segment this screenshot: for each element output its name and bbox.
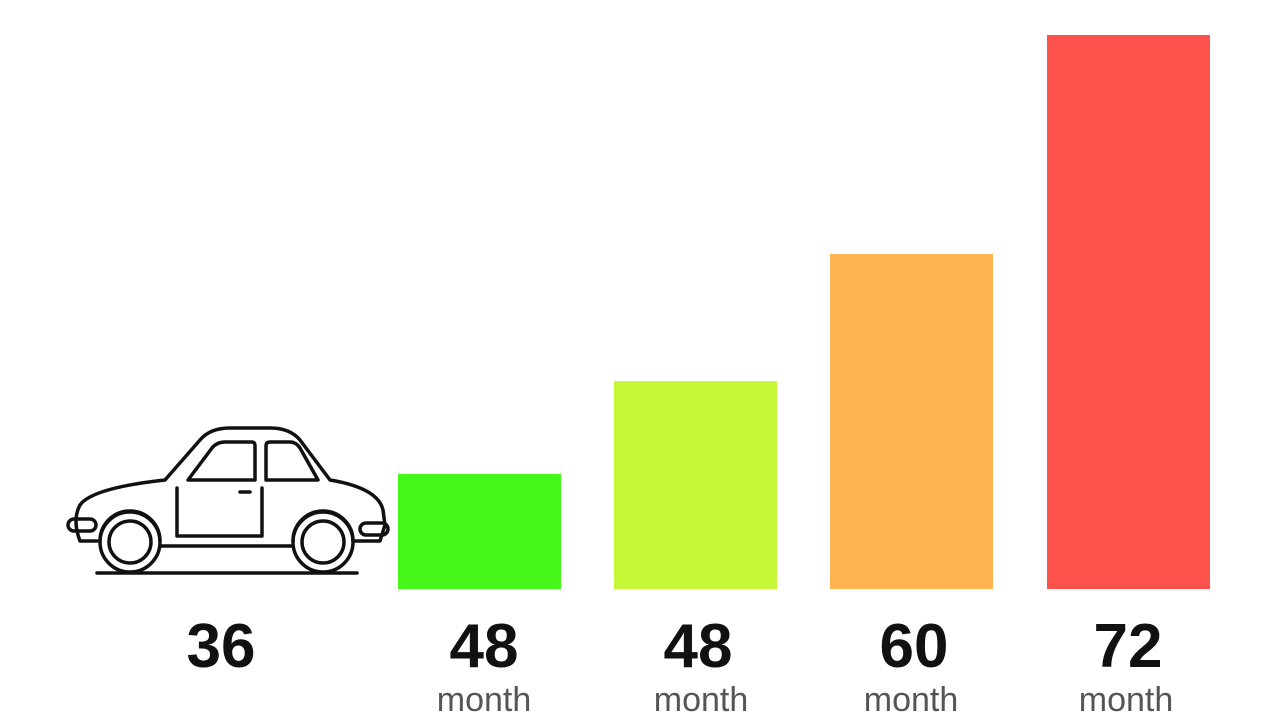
bar: 72 red <box>1047 35 1210 589</box>
label: 36: 36 <box>187 612 255 681</box>
bar: 48 green <box>398 474 561 589</box>
bar: 60 orange <box>830 254 993 589</box>
label: 48: 48 <box>450 612 518 681</box>
label: month: month <box>864 681 958 719</box>
icon: car <box>66 426 390 575</box>
bar: 48 yellow-green <box>614 381 777 589</box>
label: 72: 72 <box>1094 612 1162 681</box>
label: 60: 60 <box>880 612 948 681</box>
label: month: month <box>1079 681 1173 719</box>
label: month: month <box>654 681 748 719</box>
label: 48: 48 <box>664 612 732 681</box>
label: month: month <box>437 681 531 719</box>
